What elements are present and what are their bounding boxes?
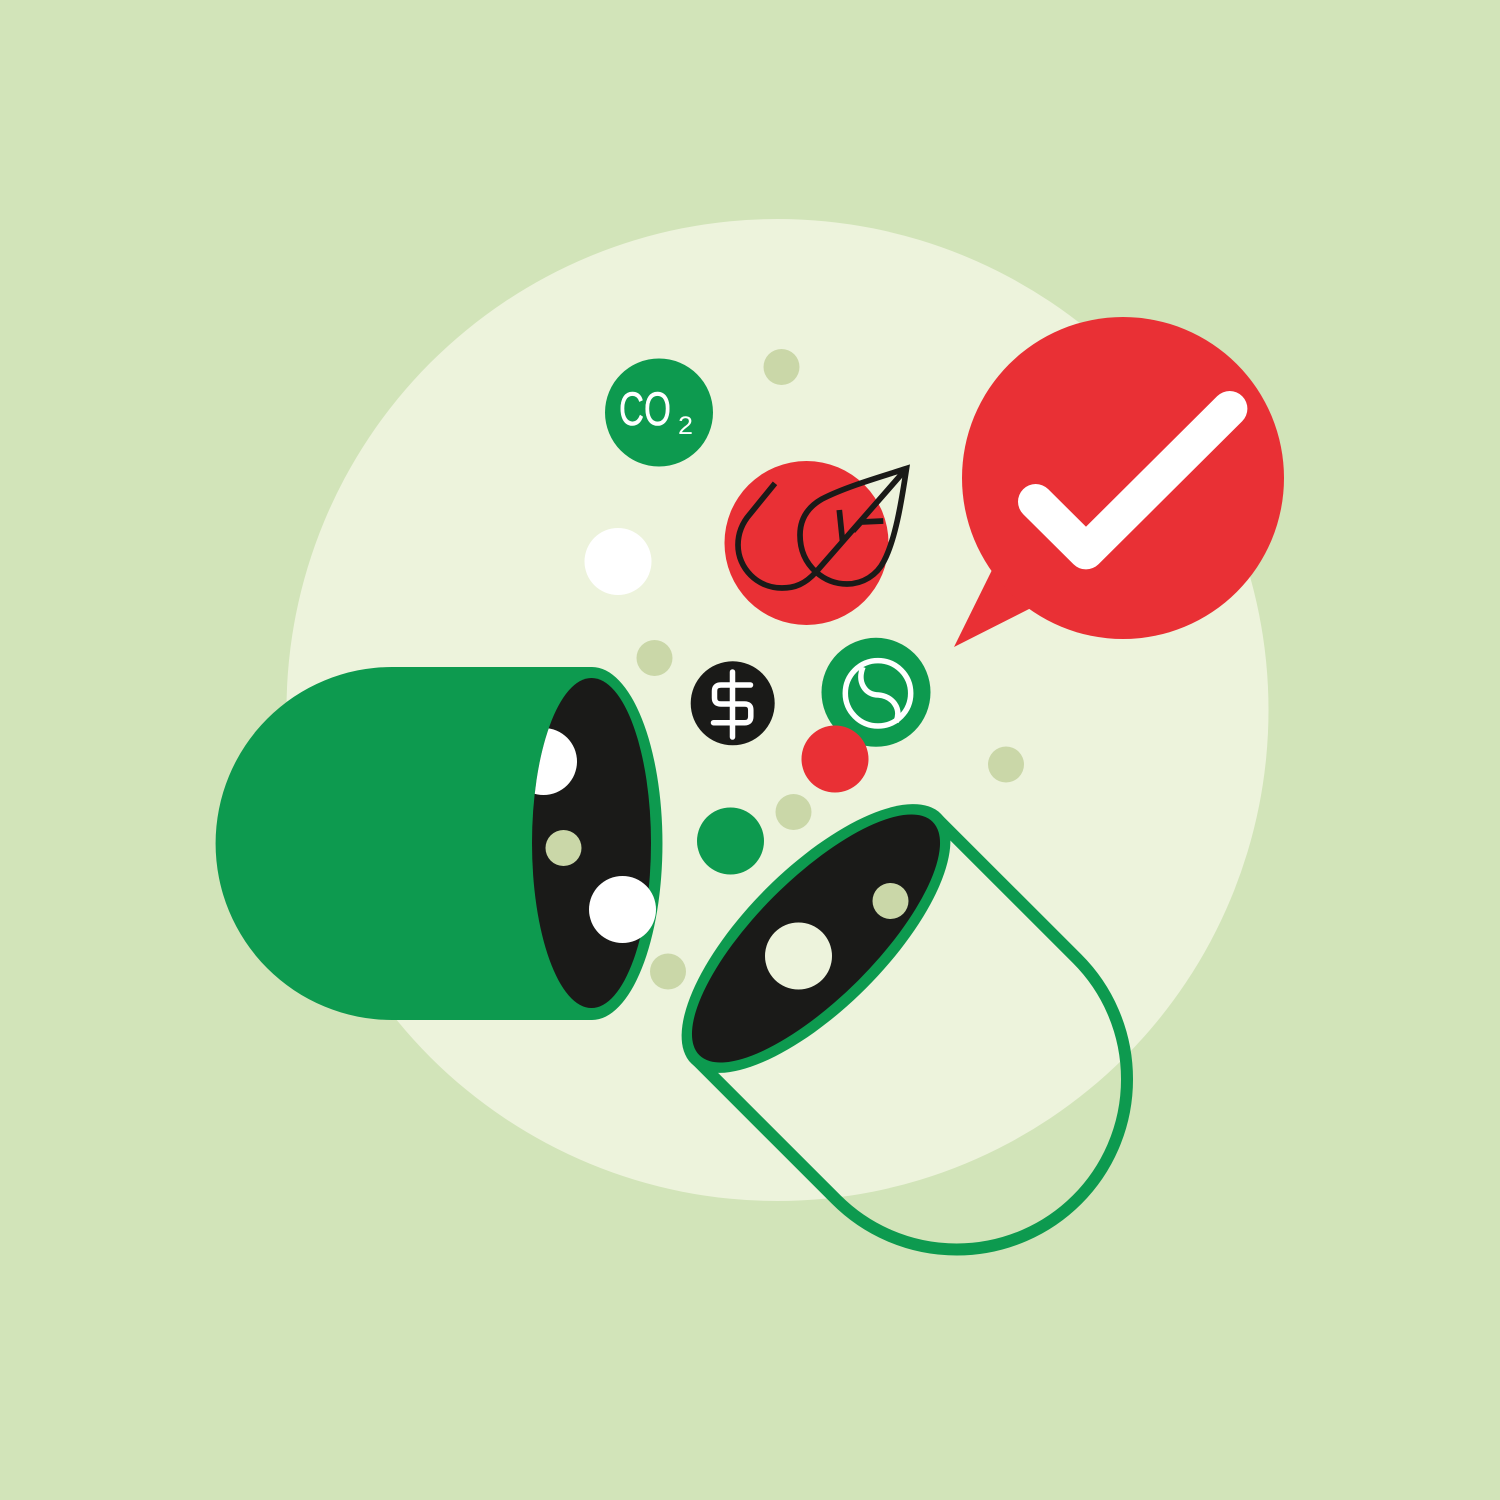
- right capsule half: [641, 764, 1202, 1324]
- left capsule half: [216, 667, 662, 1020]
- speech bubble with check mark: [954, 317, 1284, 647]
- icon: CO2 badge: 2: [678, 412, 693, 440]
- red floating dot: [802, 726, 868, 792]
- illustration: [216, 219, 1284, 1256]
- icon: CO2 badge: CO: [619, 382, 671, 435]
- green floating dot: [697, 808, 764, 874]
- pale background circle: [286, 219, 1268, 1201]
- icon: leaf badge: [724, 461, 906, 625]
- icon: dollar badge: [691, 661, 775, 745]
- white floating dot: [584, 528, 652, 595]
- icon: CO2 badge: [605, 358, 713, 466]
- floating khaki dots: [636, 349, 1024, 990]
- icon: swirl coin badge: [822, 638, 930, 747]
